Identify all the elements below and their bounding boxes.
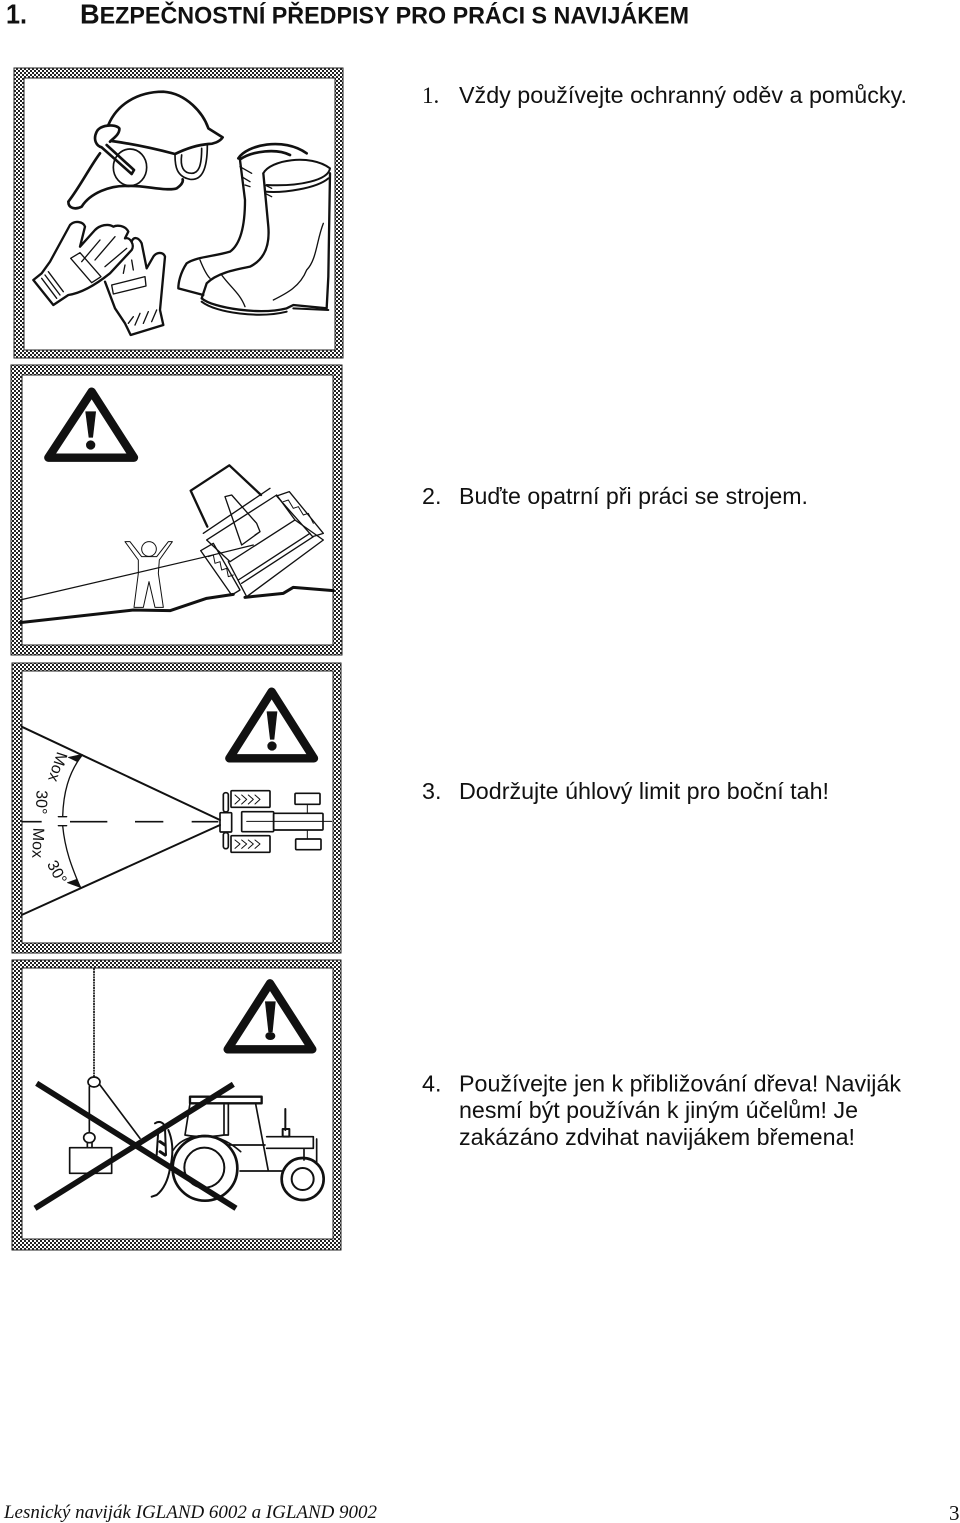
centre line bbox=[22, 819, 218, 824]
icon: warning triangle bbox=[228, 983, 312, 1049]
text: step 4 bbox=[422, 1070, 901, 1150]
text: step 1: Vždy používejte ochranný oděv a pomůcky. bbox=[459, 82, 907, 108]
icon: helmet and goggles bbox=[68, 92, 223, 208]
text: step 2: Buďte opatrní při práci se strojem. bbox=[459, 483, 808, 509]
text: step 4: zakázáno zdvihat navijákem břemena! bbox=[459, 1124, 855, 1150]
icon: tipped machine bbox=[191, 465, 323, 597]
text: step 3: Dodržujte úhlový limit pro boční tah! bbox=[459, 778, 829, 804]
angle labels: Mox bbox=[44, 750, 70, 784]
panel: lifting prohibited bbox=[12, 960, 341, 1250]
prohibition cross bbox=[35, 1083, 236, 1208]
icon: person bbox=[125, 542, 172, 607]
icon: warning triangle bbox=[48, 392, 134, 458]
icon: boots bbox=[178, 144, 330, 315]
icon: gloves bbox=[33, 222, 165, 335]
panel: side pull angle limit bbox=[12, 663, 341, 953]
icon: hanging load bbox=[70, 968, 140, 1173]
footer text: Lesnický naviják IGLAND 6002 a IGLAND 9002 bbox=[3, 1502, 377, 1523]
panel: protective gear bbox=[14, 68, 343, 358]
text: step 4: Používejte jen k přibližování dřeva! Naviják bbox=[459, 1070, 901, 1096]
angle labels bbox=[28, 750, 70, 887]
angle limit lines bbox=[22, 727, 220, 915]
panel: machine on slope bbox=[11, 365, 342, 655]
winch rope bbox=[20, 545, 253, 600]
ground line bbox=[20, 587, 333, 623]
text: step 3: 3. bbox=[422, 778, 441, 804]
text: step 4: nesmí být používán k jiným účelům! Je bbox=[459, 1097, 858, 1123]
text: step 4: 4. bbox=[422, 1070, 441, 1096]
text: step 1: 1. bbox=[422, 83, 439, 108]
angle arc with arrows bbox=[58, 754, 82, 888]
angle labels: 30° bbox=[43, 858, 69, 887]
icon: tractor side view bbox=[173, 1097, 324, 1201]
icon: winch bbox=[152, 1122, 172, 1197]
icon: tractor top view bbox=[220, 791, 332, 852]
angle labels: 30° bbox=[32, 790, 50, 815]
icon: warning triangle bbox=[229, 692, 314, 758]
angle labels: Mox bbox=[28, 828, 46, 858]
text: step 2: 2. bbox=[422, 483, 441, 509]
